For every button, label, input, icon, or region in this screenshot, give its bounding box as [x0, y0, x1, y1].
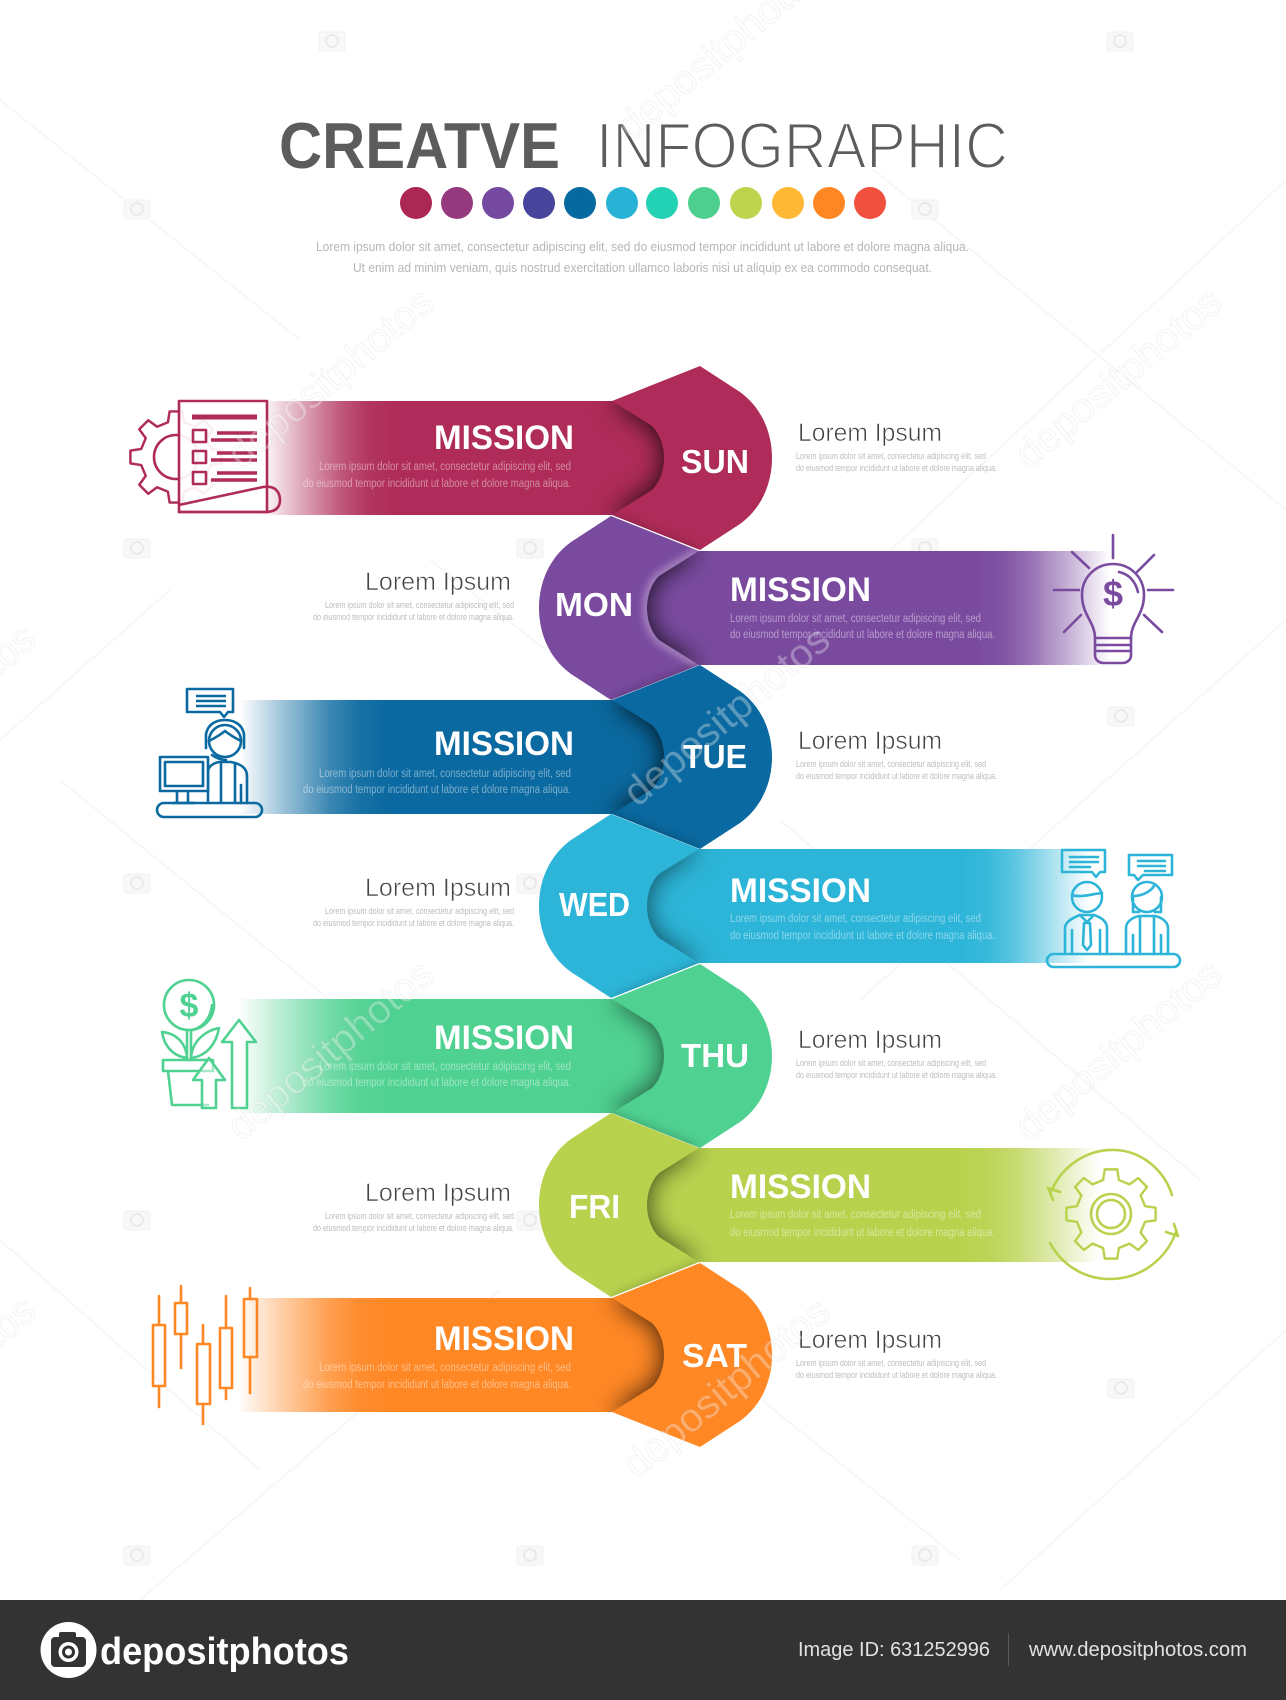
day label: MON — [555, 586, 633, 623]
heading: MISSION — [434, 1320, 574, 1358]
row: Wednesday — [313, 814, 1180, 998]
row: Saturday — [153, 1263, 997, 1447]
side text: do eiusmod tempor incididunt ut labore et dolore magna aliqua. — [796, 1370, 997, 1380]
icon: gear with rotating arrows — [1048, 1150, 1178, 1279]
watermark text: depositphotos — [219, 951, 442, 1149]
side text: Lorem ipsum dolor sit amet, consectetur adipiscing elit, sed — [796, 1058, 986, 1068]
watermark text: depositphotos — [1007, 279, 1230, 477]
day label: SAT — [682, 1337, 747, 1374]
side text — [313, 874, 514, 928]
tab: MON — [539, 516, 699, 700]
day label: SUN — [681, 443, 749, 480]
body text — [730, 1209, 995, 1239]
heading: MISSION — [434, 725, 574, 763]
day label: FRI — [569, 1188, 620, 1225]
row: Thursday — [162, 964, 997, 1148]
side text: Lorem Ipsum — [798, 419, 942, 447]
bar — [630, 551, 1110, 665]
website: www.depositphotos.com — [1028, 1639, 1247, 1661]
watermark text: depositphotos — [1007, 951, 1230, 1149]
side text: Lorem Ipsum — [798, 1326, 942, 1354]
row: Sunday — [130, 366, 997, 550]
subtitle: Lorem ipsum dolor sit amet, consectetur adipiscing elit, sed do eiusmod tempor incididunt ut labore et dolore magna aliqua. — [316, 239, 969, 254]
footer logo mark — [40, 1622, 96, 1678]
heading: MISSION — [730, 872, 871, 910]
side text: do eiusmod tempor incididunt ut labore et dolore magna aliqua. — [796, 771, 997, 781]
body text — [303, 768, 571, 796]
side text: Lorem Ipsum — [365, 1179, 511, 1207]
day label: WED — [559, 886, 630, 923]
side text: do eiusmod tempor incididunt ut labore et dolore magna aliqua. — [796, 1070, 997, 1080]
bar — [630, 1148, 1110, 1262]
tab: SUN — [612, 366, 772, 550]
row: Monday — [313, 516, 1173, 700]
body text: Lorem ipsum dolor sit amet, consectetur adipiscing elit, sed — [730, 913, 981, 925]
body text: do eiusmod tempor incididunt ut labore et dolore magna aliqua. — [303, 478, 571, 490]
tab: WED — [539, 814, 699, 998]
body text — [303, 1362, 571, 1391]
side text: Lorem Ipsum — [365, 874, 511, 902]
side text: do eiusmod tempor incididunt ut labore et dolore magna aliqua. — [796, 463, 997, 473]
subtitle: Ut enim ad minim veniam, quis nostrud exercitation ullamco laboris nisi ut aliquip ex ea commodo consequat. — [353, 260, 932, 275]
image id: Image ID: 631252996 — [798, 1639, 990, 1661]
body text — [303, 1061, 571, 1089]
body text: do eiusmod tempor incididunt ut labore et dolore magna aliqua. — [730, 1227, 995, 1239]
side text: Lorem Ipsum — [798, 1026, 942, 1054]
side text: Lorem ipsum dolor sit amet, consectetur adipiscing elit, sed — [325, 600, 514, 610]
bar — [630, 849, 1100, 963]
icon: two people talking — [1047, 850, 1180, 967]
body text: Lorem ipsum dolor sit amet, consectetur adipiscing elit, sed — [319, 768, 571, 780]
body text — [303, 461, 571, 490]
watermark text: depositphotos — [615, 617, 838, 815]
side text: Lorem ipsum dolor sit amet, consectetur adipiscing elit, sed — [325, 1211, 514, 1221]
title — [279, 109, 1008, 182]
body text: Lorem ipsum dolor sit amet, consectetur adipiscing elit, sed — [730, 1209, 981, 1221]
side text: Lorem ipsum dolor sit amet, consectetur adipiscing elit, sed — [796, 1358, 986, 1368]
heading: MISSION — [730, 571, 871, 609]
title: INFOGRAPHIC — [596, 109, 1008, 182]
body text: do eiusmod tempor incididunt ut labore et dolore magna aliqua. — [730, 930, 995, 942]
body text: Lorem ipsum dolor sit amet, consectetur adipiscing elit, sed — [319, 1061, 571, 1073]
row: Friday — [313, 1113, 1178, 1297]
body text — [730, 613, 995, 641]
body text: do eiusmod tempor incididunt ut labore et dolore magna aliqua. — [730, 629, 995, 641]
body text: Lorem ipsum dolor sit amet, consectetur adipiscing elit, sed — [730, 613, 981, 625]
icon: candlestick chart — [153, 1286, 257, 1424]
side text: Lorem Ipsum — [365, 568, 511, 596]
footer bar — [0, 1600, 1286, 1700]
side text: do eiusmod tempor incididunt ut labore et dolore magna aliqua. — [313, 612, 514, 622]
side text: Lorem ipsum dolor sit amet, consectetur adipiscing elit, sed — [325, 906, 514, 916]
footer logo text: depositphotos — [100, 1631, 349, 1673]
day label: TUE — [683, 738, 747, 775]
side text: do eiusmod tempor incididunt ut labore et dolore magna aliqua. — [313, 1223, 514, 1233]
icon: money plant with arrows: $ — [180, 987, 199, 1025]
icon: support operator — [157, 689, 262, 817]
icon: money plant with arrows — [162, 980, 256, 1108]
side text: Lorem ipsum dolor sit amet, consectetur adipiscing elit, sed — [796, 451, 986, 461]
tab: TUE — [612, 665, 772, 849]
heading: MISSION — [730, 1168, 871, 1206]
subtitle — [316, 239, 969, 275]
bar — [240, 700, 680, 814]
body text: Lorem ipsum dolor sit amet, consectetur adipiscing elit, sed — [319, 461, 571, 473]
body text — [730, 913, 995, 942]
watermark text: depositphotos — [219, 279, 442, 477]
heading: MISSION — [434, 419, 574, 457]
side text: Lorem Ipsum — [798, 727, 942, 755]
colour dots — [400, 187, 886, 219]
body text: do eiusmod tempor incididunt ut labore et dolore magna aliqua. — [303, 1077, 571, 1089]
day label: THU — [681, 1037, 749, 1074]
side text: Lorem ipsum dolor sit amet, consectetur adipiscing elit, sed — [796, 759, 986, 769]
body text: Lorem ipsum dolor sit amet, consectetur adipiscing elit, sed — [319, 1362, 571, 1374]
tab: THU — [612, 964, 772, 1148]
body text: do eiusmod tempor incididunt ut labore et dolore magna aliqua. — [303, 1379, 571, 1391]
heading: MISSION — [434, 1019, 574, 1057]
bar — [238, 1298, 680, 1412]
tab: SAT — [612, 1263, 772, 1447]
icon: light bulb with dollar — [1054, 535, 1173, 663]
row: Tuesday — [157, 665, 997, 849]
side text — [796, 727, 997, 781]
side text — [313, 1179, 514, 1233]
body text: do eiusmod tempor incididunt ut labore et dolore magna aliqua. — [303, 784, 571, 796]
tab: FRI — [539, 1113, 699, 1297]
side text: do eiusmod tempor incididunt ut labore et dolore magna aliqua. — [313, 918, 514, 928]
side text — [796, 419, 997, 473]
bar — [262, 401, 682, 515]
bar — [238, 999, 680, 1113]
side text — [313, 568, 514, 622]
icon: gear and document — [130, 401, 280, 512]
icon: light bulb with dollar: $ — [1103, 573, 1123, 614]
side text — [796, 1326, 997, 1380]
watermark camera marks — [124, 32, 1134, 1565]
side text — [796, 1026, 997, 1080]
watermark text: depositphotos — [615, 1289, 838, 1487]
title: CREATVE — [279, 109, 560, 182]
